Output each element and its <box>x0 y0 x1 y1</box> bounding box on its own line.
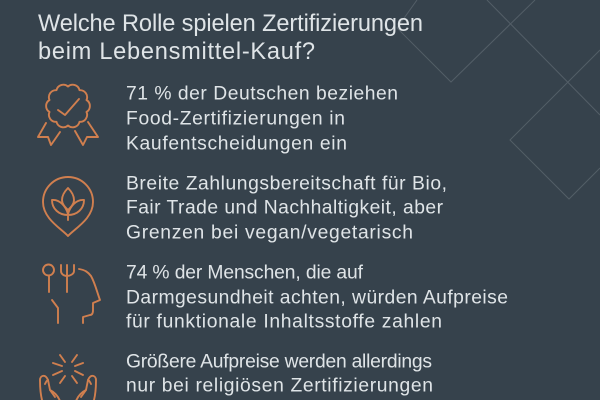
item: religious certifications <box>40 352 433 400</box>
item: willingness to pay <box>43 174 447 244</box>
text block <box>126 174 447 244</box>
text block: 71 % der Deutschen beziehen <box>126 84 398 105</box>
icon: hands with spark <box>40 355 96 400</box>
text block: Grenzen bei vegan/vegetarisch <box>126 223 413 244</box>
text block: für funktionale Inhaltsstoffe zahlen <box>126 312 442 333</box>
text block <box>126 263 508 333</box>
title: beim Lebensmittel-Kauf? <box>38 39 315 65</box>
icon: head with spoon and fork <box>43 264 100 323</box>
icon: rosette badge <box>38 85 98 145</box>
text block <box>126 352 433 397</box>
text block <box>126 84 398 155</box>
text block: 74 % der Menschen, die auf <box>126 263 364 284</box>
text block: nur bei religiösen Zertifizierungen <box>126 376 433 397</box>
title <box>38 11 423 65</box>
text block: Breite Zahlungsbereitschaft für Bio, <box>126 174 447 195</box>
text block: Food-Zertifizierungen in <box>126 109 345 130</box>
text block: Darmgesundheit achten, würden Aufpreise <box>126 288 508 309</box>
item: gut health <box>43 263 508 333</box>
text block: Größere Aufpreise werden allerdings <box>126 352 432 373</box>
text block: Fair Trade und Nachhaltigkeit, aber <box>126 198 444 219</box>
text block: Kaufentscheidungen ein <box>126 134 347 155</box>
icon: plant in map pin <box>43 177 93 236</box>
title: Welche Rolle spielen Zertifizierungen <box>38 11 423 37</box>
item: certification share <box>38 84 398 155</box>
